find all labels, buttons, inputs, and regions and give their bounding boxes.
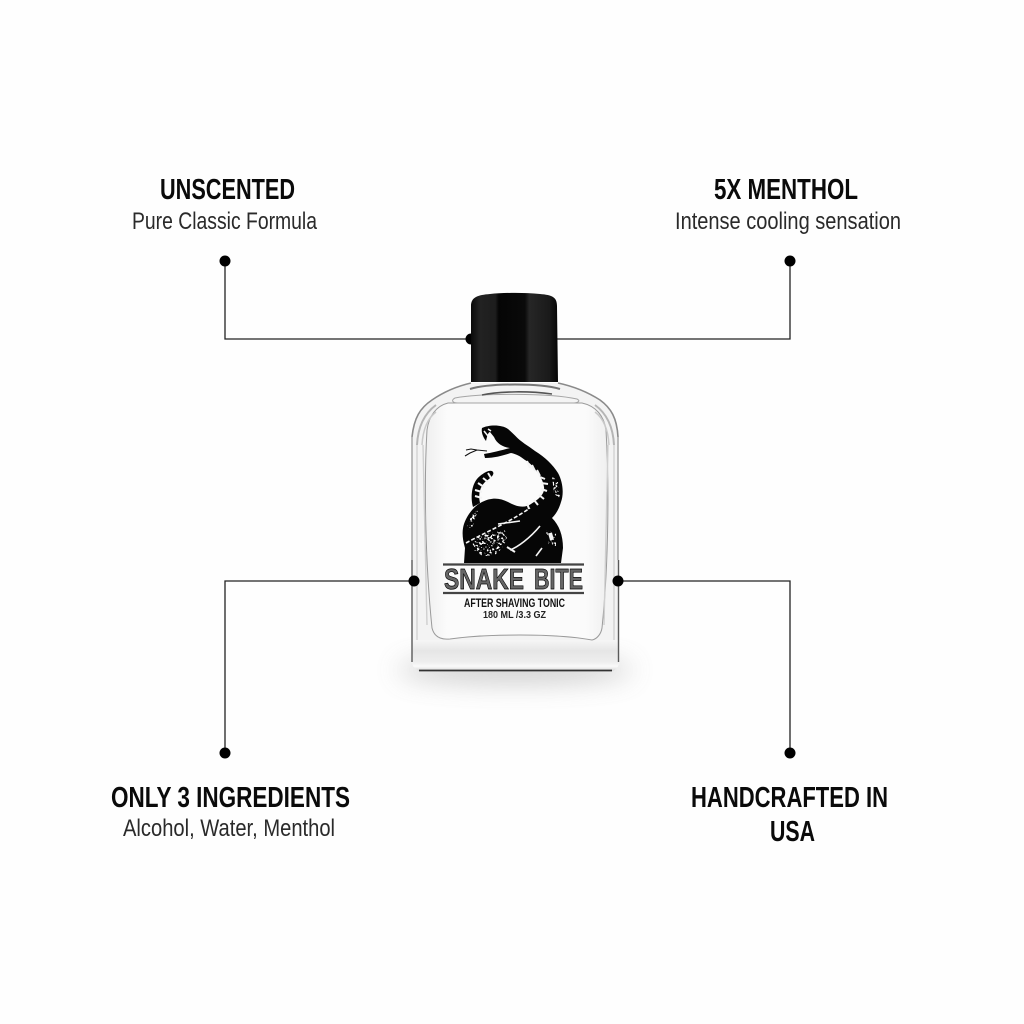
- heading line one: HANDCRAFTED IN: [691, 782, 888, 814]
- callout: handcrafted in usa: [691, 782, 888, 848]
- heading: 5X MENTHOL: [714, 174, 858, 206]
- snake illustration: [463, 426, 563, 563]
- bottle cap: [471, 293, 558, 382]
- connector: unscented to cap: [220, 256, 476, 344]
- heading: UNSCENTED: [160, 174, 295, 206]
- label: brand name: BITE: [534, 564, 583, 596]
- label: product description: AFTER SHAVING TONIC: [464, 598, 565, 610]
- callout: 5x menthol: [675, 174, 901, 235]
- connector: handcrafted to bottle: [618, 581, 796, 758]
- snake markings: [466, 429, 552, 556]
- description: Intense cooling sensation: [675, 208, 901, 235]
- snake scale speckle: [466, 476, 560, 556]
- bottle shadow: [397, 657, 633, 683]
- bottle glass body: [412, 383, 619, 671]
- snake tail: [472, 471, 493, 507]
- heading line two: USA: [770, 816, 815, 848]
- callout: unscented: [132, 174, 318, 235]
- connector: 5x menthol to cap: [555, 256, 796, 339]
- label: brand name: SNAKE: [444, 564, 524, 596]
- heading: ONLY 3 INGREDIENTS: [111, 782, 350, 814]
- snake tongue: [465, 449, 487, 456]
- connector dot right: [612, 576, 624, 586]
- label: volume: 180 ML /3.3 GZ: [483, 609, 546, 621]
- snake body: [463, 426, 563, 563]
- description: Pure Classic Formula: [132, 208, 318, 235]
- description: Alcohol, Water, Menthol: [123, 815, 335, 842]
- product: bottle: [397, 293, 633, 683]
- connector: only 3 ingredients to bottle: [220, 581, 414, 758]
- callout: only 3 ingredients: [111, 782, 350, 842]
- connector dot left: [408, 576, 420, 586]
